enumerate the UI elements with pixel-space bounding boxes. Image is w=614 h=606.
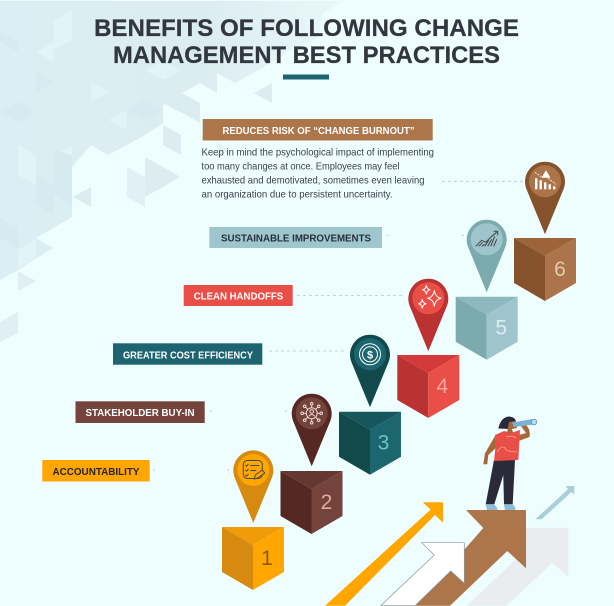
- label: STAKEHOLDER BUY-IN: [86, 408, 194, 419]
- cube: 4: [436, 375, 448, 398]
- description text: too many changes at once. Employees may feel: [202, 161, 400, 172]
- title: [94, 15, 519, 69]
- pin with rising chart icon: [467, 220, 507, 292]
- label: SUSTAINABLE IMPROVEMENTS: [221, 234, 371, 245]
- pin with declining chart icon: [525, 162, 565, 234]
- description text: [202, 147, 434, 200]
- arrow: brown: [415, 510, 526, 606]
- connector dashed line: [297, 294, 405, 296]
- label: [42, 460, 150, 482]
- step 4: clean handoffs: [184, 279, 459, 418]
- pin with dollar coin icon: [350, 335, 390, 407]
- cube: 6: [554, 258, 566, 281]
- pin with network icon: [292, 394, 332, 466]
- title: MANAGEMENT BEST PRACTICES: [113, 42, 500, 69]
- title: BENEFITS OF FOLLOWING CHANGE: [94, 15, 519, 42]
- cube: 2: [321, 491, 332, 514]
- growth arrows: [325, 486, 574, 606]
- label: REDUCES RISK OF “CHANGE BURNOUT”: [222, 126, 414, 137]
- shirt: [494, 430, 520, 461]
- telescope: [512, 419, 534, 427]
- cube: 3: [378, 432, 389, 455]
- label: [113, 343, 262, 365]
- connector dots: [153, 469, 229, 471]
- cube: [514, 238, 576, 301]
- legs: [486, 460, 515, 504]
- label: [209, 227, 382, 248]
- arrow: small light blue: [535, 486, 574, 519]
- head and hair: [498, 416, 516, 429]
- pin with checklist icon: [233, 450, 273, 523]
- arrow: white: [381, 543, 464, 606]
- label: GREATER COST EFFICIENCY: [123, 350, 253, 361]
- step 2: stakeholder buy-in: [76, 394, 342, 534]
- pin with sparkle icon: [408, 279, 448, 351]
- pin with dollar coin icon: $: [367, 349, 373, 361]
- shoes: [486, 504, 516, 510]
- connector dashed line: [442, 180, 525, 182]
- description text: exhausted and demotivated, sometimes even leaving: [202, 175, 425, 186]
- cube: [339, 412, 401, 475]
- step 1: accountability: [42, 450, 284, 590]
- cube: [280, 471, 342, 534]
- step 6: reduces risk of change burnout: [202, 119, 576, 301]
- description text: an organization due to persistent uncertainty.: [202, 189, 392, 200]
- label: [203, 119, 433, 140]
- cube: 5: [495, 317, 507, 340]
- label: ACCOUNTABILITY: [52, 467, 140, 478]
- title underline: [283, 74, 329, 80]
- arms: [483, 424, 530, 464]
- cube: 1: [261, 547, 273, 570]
- label: [76, 401, 205, 423]
- connector dots: [210, 410, 287, 412]
- arrow: yellow: [325, 502, 443, 606]
- step 5: sustainable improvements: [209, 220, 518, 360]
- connector dashed line: [269, 350, 346, 352]
- label: CLEAN HANDOFFS: [194, 292, 283, 302]
- cube: [397, 355, 459, 418]
- arrow: pale grey: [467, 528, 568, 606]
- step 3: greater cost efficiency: [113, 335, 401, 475]
- background triangle pattern: [0, 1, 343, 342]
- description text: Keep in mind the psychological impact of implementing: [202, 147, 434, 158]
- cube: [222, 527, 284, 590]
- label: [184, 285, 293, 306]
- connector dots: [386, 234, 464, 236]
- cube: [456, 297, 518, 360]
- person with telescope: [483, 416, 537, 510]
